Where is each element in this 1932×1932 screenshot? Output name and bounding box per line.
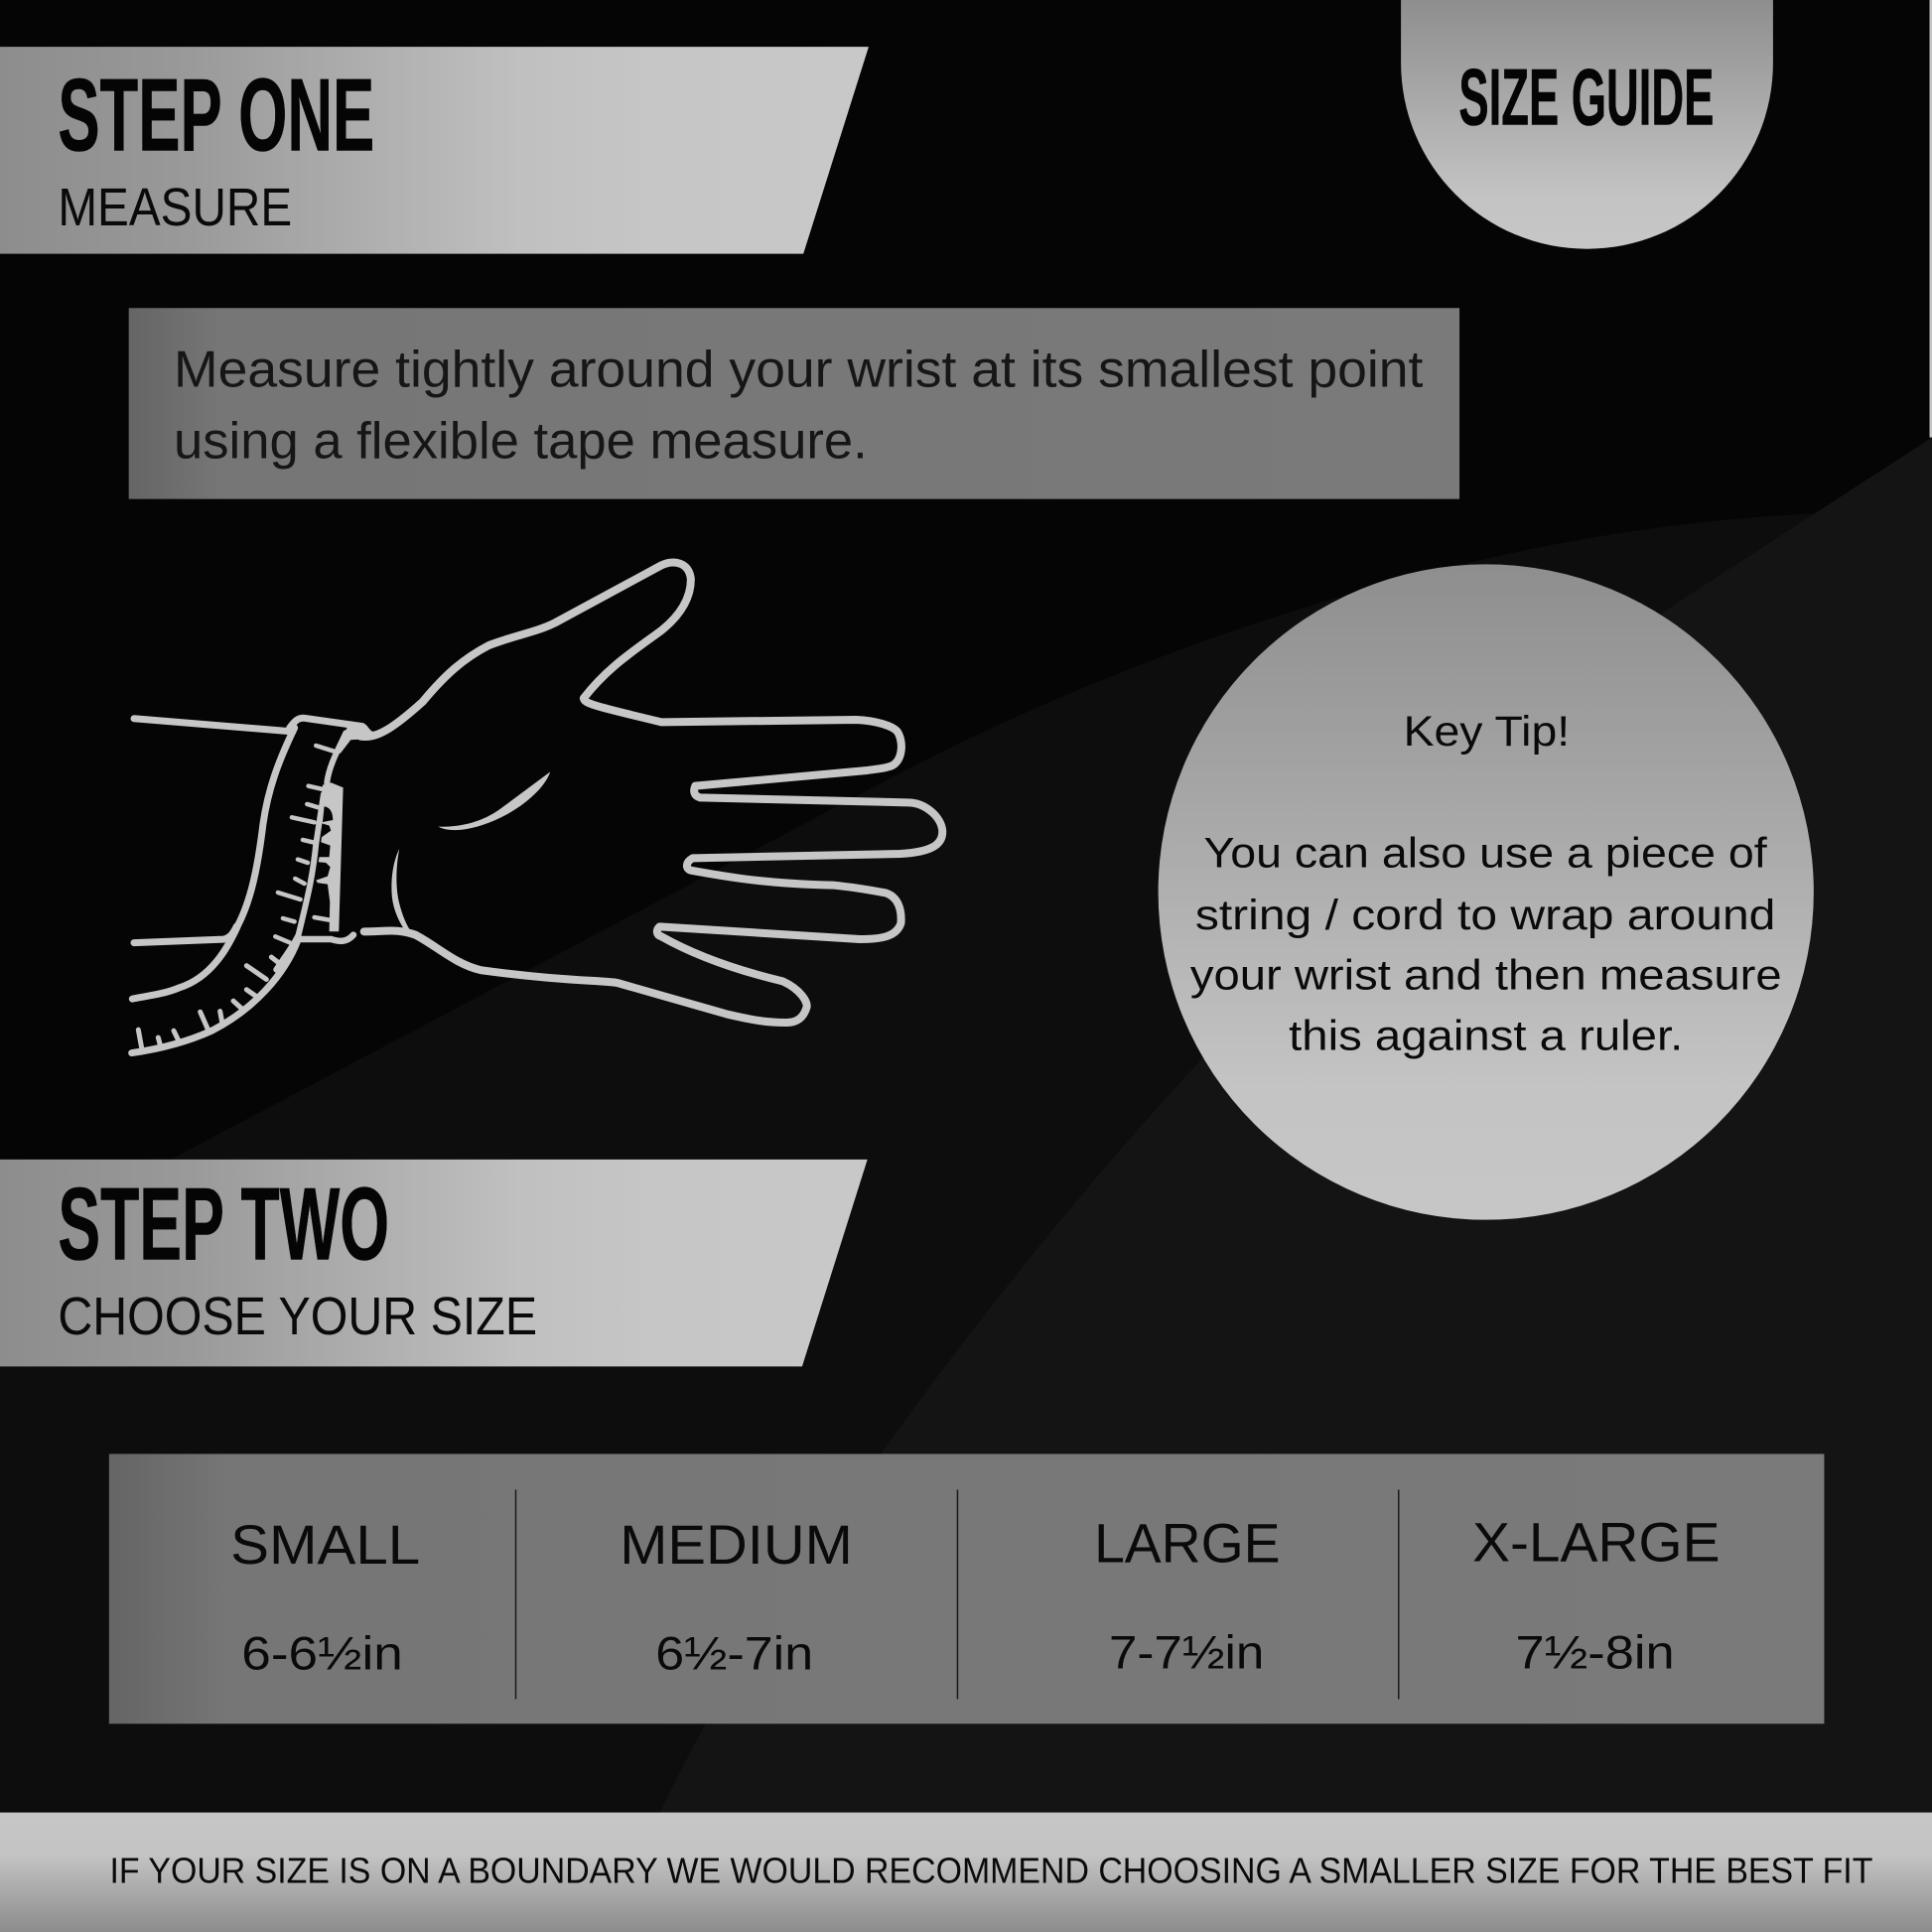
palm crease (438, 771, 550, 830)
tape inner edge (276, 733, 345, 970)
tape bottom edge (298, 935, 353, 941)
size: small (230, 1513, 420, 1680)
heading: step one: STEP ONE (58, 58, 374, 173)
tape tick marks (138, 957, 278, 1047)
tape measure at wrist (275, 718, 372, 970)
footer note (0, 1813, 1932, 1932)
tape measure lower section and forearm (132, 719, 298, 1053)
tape band (316, 782, 344, 931)
footer text: IF YOUR SIZE IS ON A BOUNDARY WE WOULD RECOMMEND CHOOSING A SMALLER SIZE FOR THE BEST FIT (109, 1850, 1872, 1890)
size: large: LARGE (1094, 1512, 1280, 1575)
subheading: choose your size: CHOOSE YOUR SIZE (58, 1288, 537, 1346)
tape top edge and wrist join (290, 718, 371, 735)
illustration: hand with tape measure around wrist (132, 563, 942, 1053)
size: medium: MEDIUM (620, 1513, 853, 1576)
callout: key tip (1159, 564, 1814, 1220)
size: x-large (1472, 1510, 1721, 1678)
wrist crease (391, 849, 411, 932)
badge title: SIZE GUIDE (1458, 53, 1714, 142)
key tip text (1190, 708, 1782, 1058)
key tip text: You can also use a piece of (1204, 830, 1767, 877)
instruction text (174, 342, 1424, 471)
banner: step one (0, 47, 869, 254)
hand outline (360, 563, 942, 1023)
size: medium: 6½-7in (655, 1627, 813, 1680)
key tip text: string / cord to wrap around (1195, 892, 1775, 938)
instruction text: Measure tightly around your wrist at its smallest point (174, 342, 1424, 399)
tape edges (132, 728, 295, 999)
key tip text: your wrist and then measure (1190, 952, 1782, 999)
panel: measuring instruction (129, 308, 1459, 499)
size: large: 7-7½in (1109, 1625, 1264, 1678)
size: large (1094, 1512, 1280, 1678)
panel: size table (109, 1453, 1824, 1724)
tape ticks near wrist (275, 746, 336, 942)
subheading: measure: MEASURE (58, 179, 292, 237)
key tip text: this against a ruler. (1289, 1012, 1683, 1058)
size: medium (620, 1513, 853, 1680)
key tip text: Key Tip! (1404, 708, 1570, 755)
size: small: SMALL (230, 1513, 420, 1576)
heading: step two: STEP TWO (58, 1167, 389, 1282)
size: small: 6-6½in (241, 1627, 403, 1680)
instruction text: using a flexible tape measure. (174, 413, 868, 471)
size: x-large: X-LARGE (1472, 1510, 1721, 1573)
banner: step two (0, 1160, 868, 1366)
badge: size guide (1401, 0, 1773, 249)
size: x-large: 7½-8in (1516, 1625, 1675, 1678)
forearm lines (134, 719, 288, 943)
